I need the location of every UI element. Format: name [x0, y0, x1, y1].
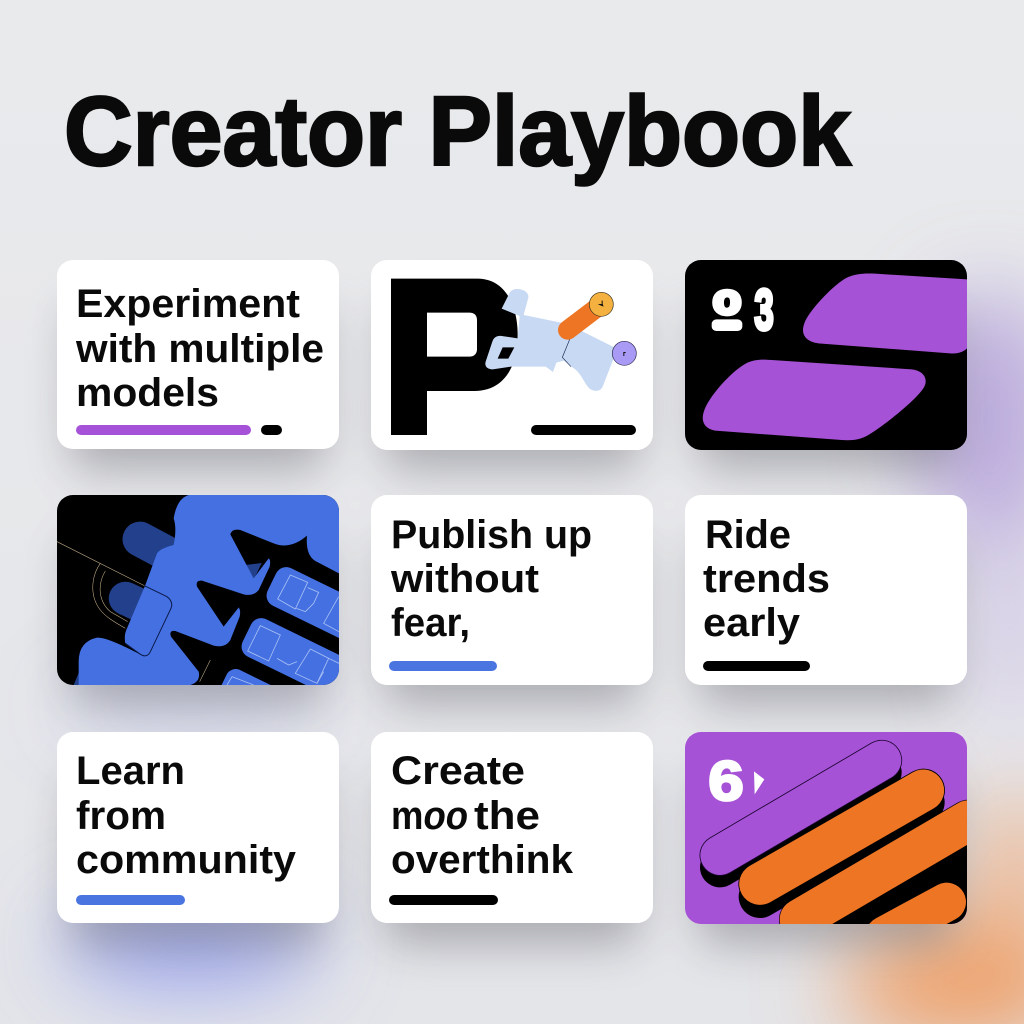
progress bar: black [389, 895, 498, 905]
panel: publish up without fear [371, 495, 653, 685]
icon: small triangle [754, 771, 764, 794]
card text: ride: trends [703, 557, 830, 601]
progress bar: black [531, 425, 636, 435]
card text: publish: fear, [391, 601, 470, 645]
panel: blue abstract keyboard [57, 495, 339, 685]
card text: learn: from [76, 794, 166, 838]
number: 03: 3 [754, 279, 774, 343]
card text: create: overthink [391, 838, 574, 882]
progress bar: purple [76, 425, 251, 435]
icon: purple dial [612, 341, 636, 365]
shape: keyboard keys [222, 567, 339, 685]
card text: create: Create [391, 749, 525, 793]
shape: purple capsule [720, 760, 882, 867]
shape: dark blue fingers [74, 515, 262, 685]
card text: ride: early [703, 601, 801, 645]
card text: learn: community [76, 838, 297, 882]
panel: P illustration [371, 260, 653, 450]
progress bar: blue [389, 661, 497, 671]
card text: publish: without [390, 557, 539, 601]
panel: 6 orange capsules [685, 732, 968, 935]
card text: learn [76, 749, 297, 882]
card text: experiment: models [76, 371, 219, 415]
icon: letter P [391, 279, 518, 435]
card text: create [391, 749, 574, 882]
shape: upper purple slab [803, 274, 967, 353]
progress bar: black dash [261, 425, 282, 435]
illustration: pale blue shape [485, 289, 614, 391]
card text: experiment [75, 282, 324, 415]
title: Creator Playbook [64, 76, 851, 186]
card text: create: moo [391, 794, 468, 838]
progress bar: black [703, 661, 810, 671]
number: 03: o [713, 276, 741, 323]
shape: outlined tile [125, 586, 172, 656]
thin gold lines [57, 542, 210, 682]
panel: learn from community [57, 732, 339, 923]
panel: create overthink [371, 732, 653, 923]
number: 6 [708, 749, 764, 812]
card text: create: the [474, 794, 540, 838]
card text: publish: Publish up [391, 513, 592, 557]
card text: ride: Ride [705, 513, 791, 557]
shape: lower purple slab [703, 360, 926, 440]
shape: orange capsule 2 [800, 821, 968, 919]
shape: main blue hand [79, 495, 339, 685]
panel: ride trends early [685, 495, 967, 685]
panel: 03 purple shapes [685, 260, 967, 450]
card text: learn: Learn [76, 749, 185, 793]
shape: black wedge below capsule 2 [834, 846, 967, 924]
number: 6: 6 [708, 749, 744, 812]
shape: orange capsule 3 [885, 902, 947, 935]
number: 03 [712, 276, 774, 343]
card text: experiment: Experiment [76, 282, 300, 326]
shape: orange capsule 1 [760, 790, 923, 897]
card text: experiment: with multiple [75, 327, 324, 371]
panel: experiment with multiple models [57, 260, 339, 449]
progress bar: blue [76, 895, 185, 905]
card text: ride [703, 513, 830, 645]
card text: publish [390, 513, 592, 645]
icon: orange cylinder [568, 292, 613, 330]
card shadows [70, 305, 954, 945]
key outlines [227, 575, 339, 685]
